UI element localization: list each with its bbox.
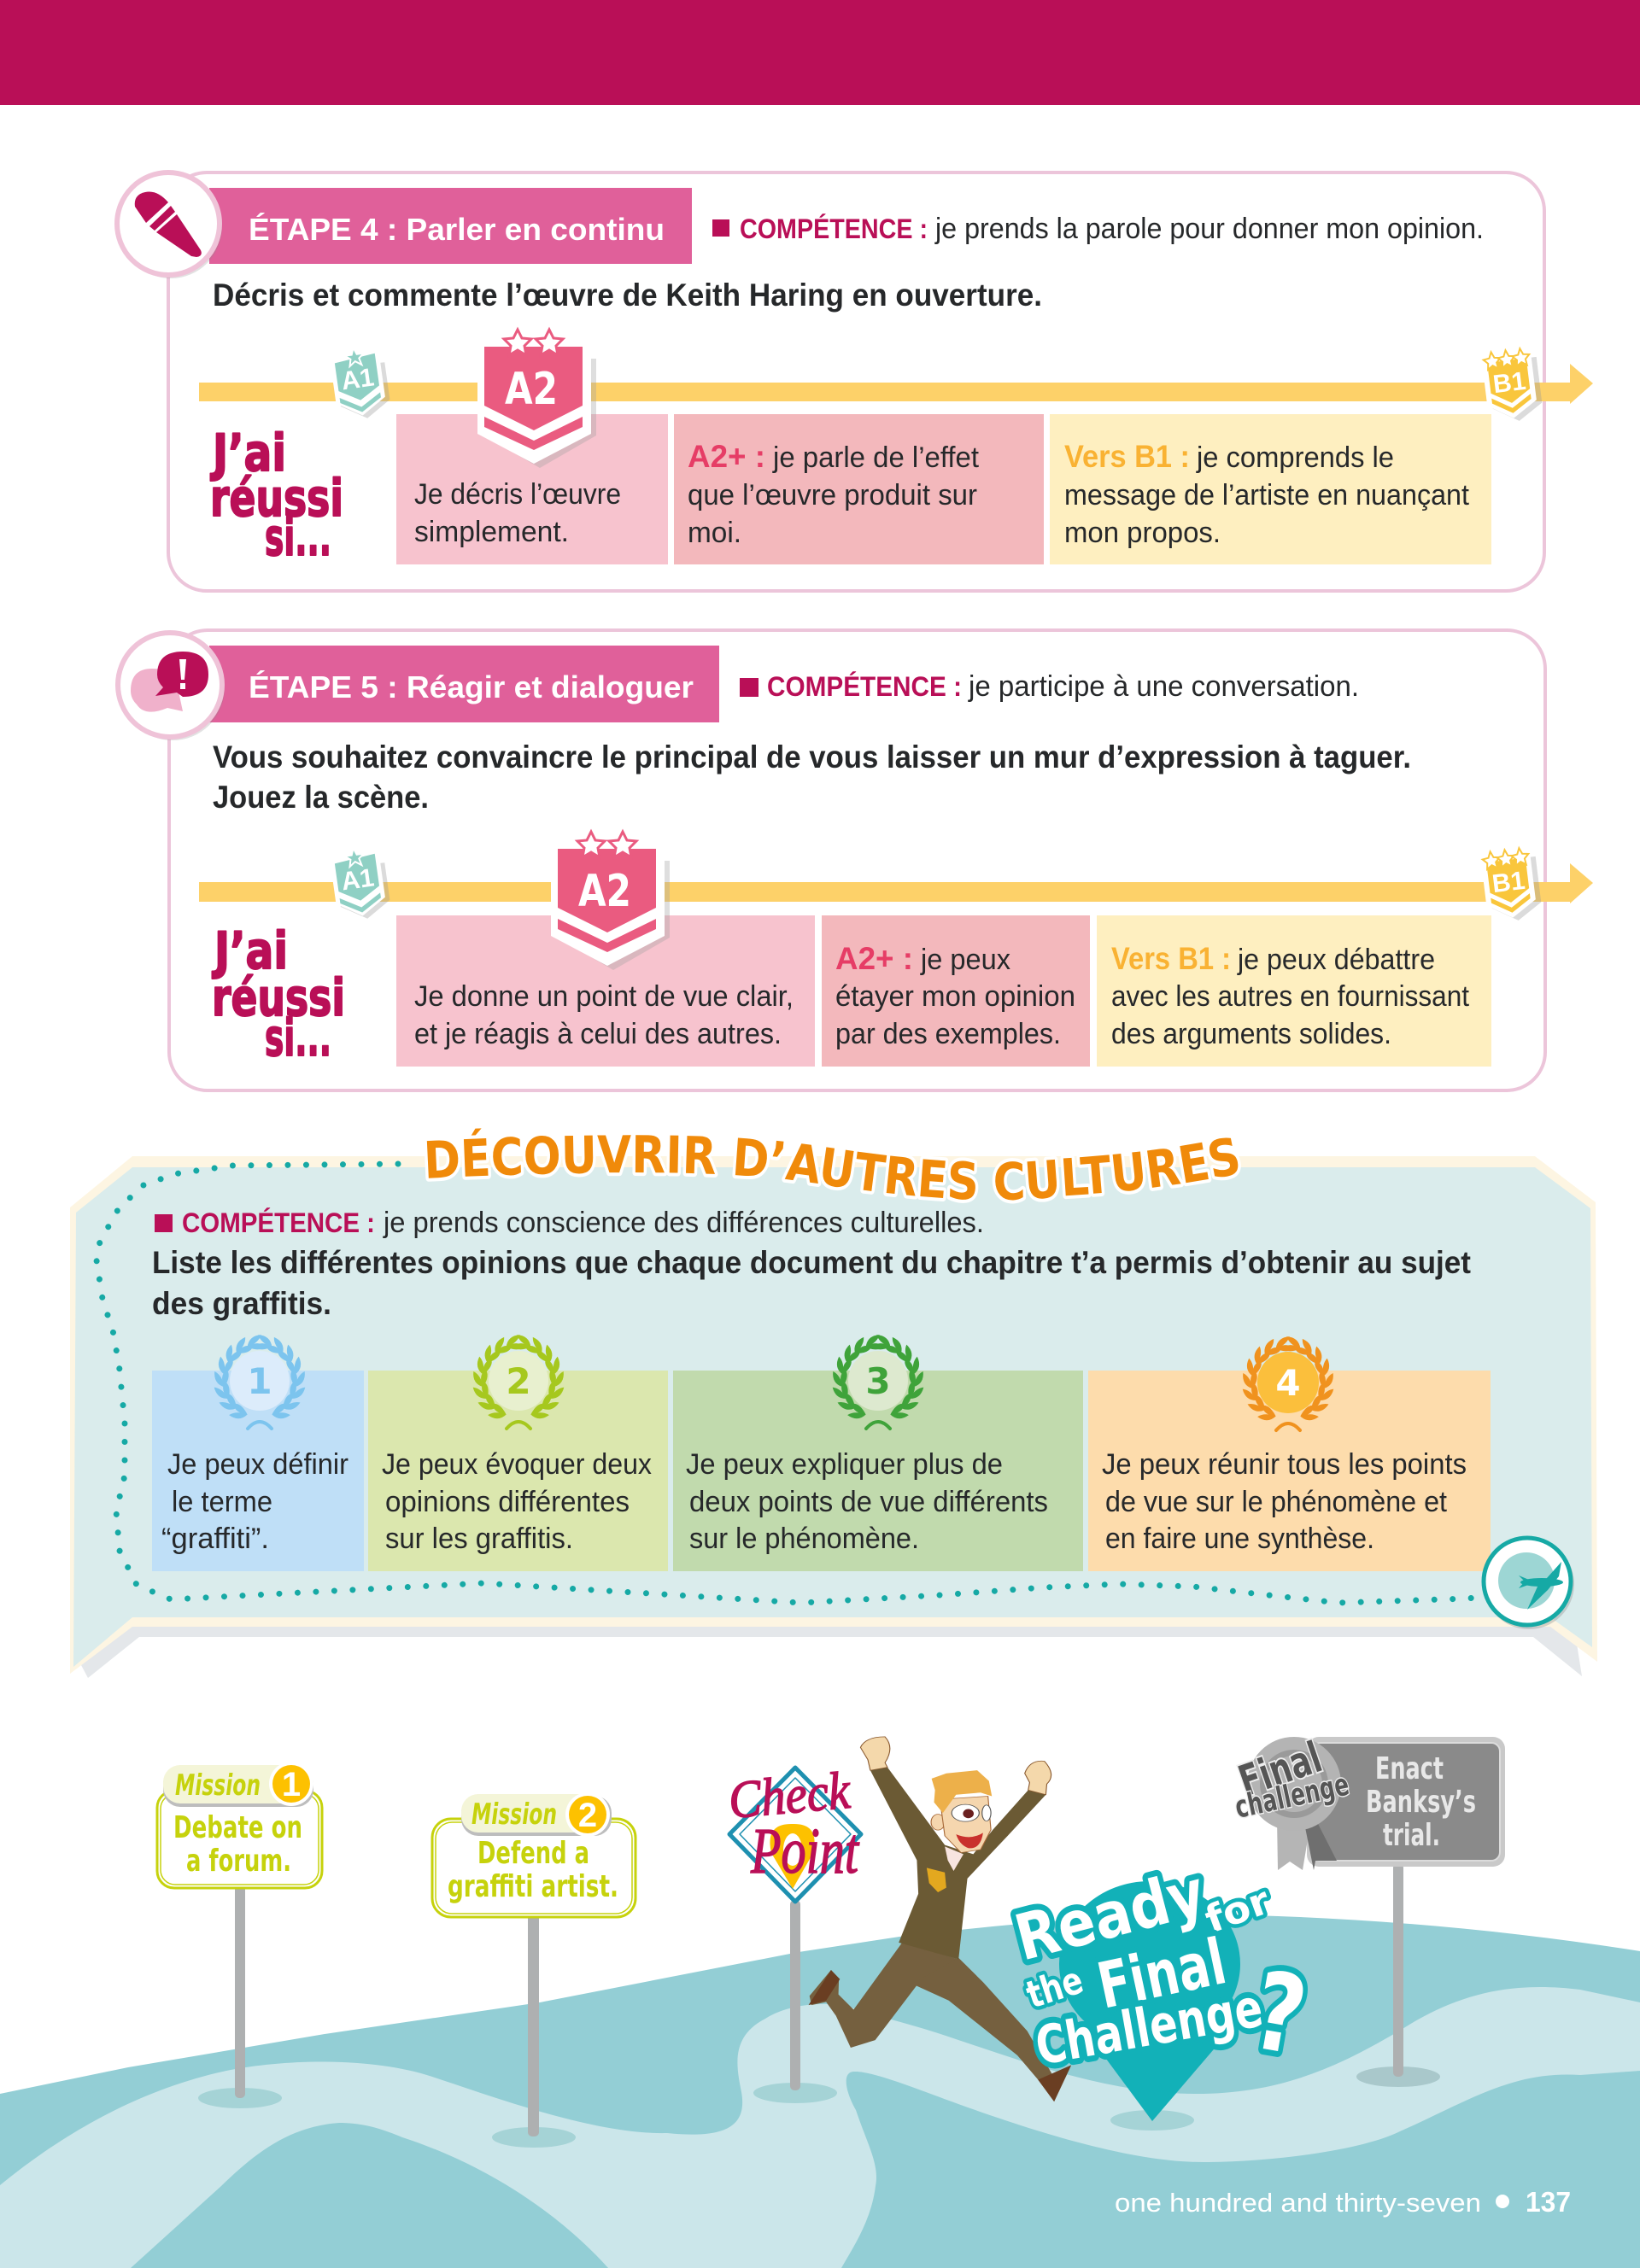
heading banner: étape 4: ÉTAPE 4 : Parler en continu: [249, 212, 665, 247]
badge B1: B1: [1491, 367, 1527, 399]
near leg: [912, 1958, 1052, 2081]
result box: A2+: que l’œuvre produit sur: [688, 479, 977, 511]
result box: A2: [396, 414, 668, 564]
j'ai réussi si: J’ai: [210, 424, 286, 483]
level arrow: [199, 863, 1593, 903]
result box: A2: Je donne un point de vue clair,: [414, 980, 794, 1013]
character: jumping boy: [809, 1737, 1071, 2101]
j'ai réussi si: J’ai: [212, 921, 288, 981]
icon: microphone: [117, 172, 222, 278]
result box: A2+: je peux: [920, 944, 1010, 976]
sign: final challenge: Enact: [1375, 1751, 1444, 1786]
pin: ready for the final challenge: ?: [1245, 1948, 1315, 2080]
section title: DÉCOUVRIR D’AUTRES CULTURES: [425, 1128, 1241, 1204]
badge A2: [477, 330, 596, 468]
laurel 3: 3: [865, 1360, 891, 1402]
laurel 4: [1242, 1336, 1334, 1430]
sign: mission 1: 1: [282, 1766, 301, 1803]
level arrow: [199, 364, 1593, 404]
pin: ready for the final challenge: Challenge: [1031, 1976, 1268, 2078]
sign: mission 1: a forum.: [186, 1844, 291, 1879]
sign: final challenge: Final: [1233, 1733, 1328, 1806]
badge A1: A1: [339, 363, 376, 395]
pin: ready for the final challenge: Final: [1092, 1925, 1232, 2024]
page number: one hundred and thirty-seven: [1115, 2188, 1481, 2218]
result box: A2+: par des exemples.: [835, 1018, 1061, 1050]
badge A2: A2: [505, 364, 558, 415]
card 4: en faire une synthèse.: [1105, 1523, 1374, 1555]
result box: vers B1: [1050, 414, 1491, 564]
laurel 2: [472, 1334, 565, 1429]
result box: A2: Je décris l’œuvre: [414, 478, 621, 511]
panel: étape 4: [117, 172, 1593, 591]
shield crest: [927, 1868, 946, 1892]
sign: mission 1: [157, 1762, 322, 2108]
competence line: je prends conscience des différences culturelles.: [383, 1207, 984, 1239]
laurel 4: 4: [1275, 1362, 1301, 1404]
icon: speech bubbles: [118, 633, 225, 740]
result box: A2+: A2+ :: [835, 941, 913, 976]
badge B1: [1480, 846, 1543, 924]
badge A2: A2: [578, 866, 631, 917]
dotted route: [97, 1164, 1491, 1603]
card 1: le terme: [172, 1486, 272, 1518]
j'ai réussi si: si...: [265, 508, 331, 568]
sign: final challenge: Banksy’s: [1366, 1785, 1476, 1820]
sign: final challenge: trial.: [1383, 1818, 1440, 1853]
top banner: [0, 0, 1640, 105]
pin: ready for the final challenge: Ready: [1008, 1856, 1212, 1975]
result box: A2+: [822, 915, 1090, 1067]
instruction: des graffitis.: [152, 1286, 331, 1321]
card 4: [1088, 1371, 1491, 1571]
heading banner: étape 5: [209, 646, 719, 722]
competence line: COMPÉTENCE :: [740, 213, 928, 244]
card 3: sur le phénomène.: [689, 1523, 919, 1555]
result box: vers B1: avec les autres en fournissant: [1111, 980, 1470, 1013]
instruction: [152, 1245, 1471, 1321]
panel: découvrir d'autres cultures: [70, 1128, 1597, 1678]
result box: vers B1: message de l’artiste en nuançant: [1064, 479, 1470, 511]
j'ai réussi si: si...: [265, 1008, 331, 1068]
result box: vers B1: [1097, 915, 1491, 1067]
laurel 3: [832, 1334, 924, 1429]
sign: check point: [726, 1762, 861, 2103]
card 3: [673, 1371, 1083, 1571]
result box: A2+: étayer mon opinion: [835, 980, 1075, 1013]
instruction: [213, 739, 1411, 815]
heading banner: étape 4: [209, 188, 692, 264]
competence line: COMPÉTENCE :: [767, 671, 962, 702]
result box: A2+: je parle de l’effet: [772, 441, 980, 474]
card 2: [368, 1371, 668, 1571]
j'ai réussi si: réussi: [212, 968, 345, 1028]
left eye: [952, 1804, 979, 1821]
laurel 1: [214, 1334, 306, 1429]
sign: mission 1: Mission: [175, 1768, 261, 1803]
card 1: “graffiti”.: [161, 1523, 269, 1555]
instruction: Vous souhaitez convaincre le principal de vous laisser un mur d’expression à taguer.: [213, 739, 1411, 775]
landscape hills: [0, 1914, 1640, 2268]
j'ai réussi si: réussi: [210, 469, 343, 529]
result box: vers B1: mon propos.: [1064, 517, 1221, 549]
sign: mission 2: [432, 1792, 636, 2148]
torso and arms: [870, 1768, 1046, 1960]
far leg: [810, 1943, 958, 2048]
result box: A2: [396, 915, 815, 1067]
icon: plane: [1484, 1538, 1574, 1629]
competence line: [740, 670, 1359, 703]
right eye: [982, 1805, 991, 1821]
badge A2: [551, 832, 670, 970]
heading banner: étape 5: ÉTAPE 5 : Réagir et dialoguer: [249, 669, 694, 704]
shoes: [809, 1970, 1071, 2101]
pin: ready for the final challenge: [1008, 1856, 1315, 2131]
card 3: deux points de vue différents: [689, 1486, 1048, 1518]
competence line: COMPÉTENCE :: [182, 1207, 375, 1238]
pin: ready for the final challenge: for: [1199, 1879, 1275, 1942]
sign: check point: Check: [726, 1762, 853, 1830]
sign: final challenge: [1232, 1733, 1505, 2087]
page number: 137: [1526, 2186, 1571, 2218]
instruction: Jouez la scène.: [213, 780, 429, 815]
laurel 2: 2: [506, 1360, 531, 1402]
result box: vers B1: Vers B1 :: [1111, 941, 1231, 976]
result box: A2+: [674, 414, 1044, 564]
hair: [932, 1770, 992, 1813]
j'ai réussi si: [212, 921, 345, 1068]
laurel 1: 1: [247, 1360, 272, 1402]
shirt collar: [945, 1846, 964, 1871]
sign: mission 2: Mission: [472, 1797, 557, 1832]
panel frame: [169, 630, 1545, 1090]
sign: mission 2: graffiti artist.: [448, 1869, 618, 1904]
card 4: Je peux réunir tous les points: [1102, 1448, 1467, 1481]
instruction: Décris et commente l’œuvre de Keith Haring en ouverture.: [213, 278, 1042, 313]
badge B1: B1: [1491, 867, 1526, 898]
result box: A2: simplement.: [414, 516, 569, 548]
panel frame: [168, 172, 1544, 591]
card 4: de vue sur le phénomène et: [1105, 1486, 1448, 1518]
sign: mission 2: Defend a: [477, 1836, 589, 1871]
instruction: Liste les différentes opinions que chaque document du chapitre t’a permis d’obtenir au sujet: [152, 1245, 1471, 1280]
panel: étape 5: [118, 630, 1593, 1090]
badge A1: [329, 845, 392, 922]
card 3: Je peux expliquer plus de: [686, 1448, 1003, 1481]
badge A1: [329, 344, 392, 422]
badge B1: [1481, 347, 1543, 424]
result box: vers B1: des arguments solides.: [1111, 1018, 1391, 1050]
mouth: [956, 1833, 983, 1848]
competence line: [712, 213, 1484, 245]
result box: vers B1: je comprends le: [1196, 441, 1394, 474]
card 1: Je peux définir: [167, 1448, 348, 1481]
card 2: Je peux évoquer deux: [382, 1448, 652, 1481]
sign: final challenge: challenge: [1232, 1768, 1352, 1826]
result box: vers B1: Vers B1 :: [1064, 439, 1190, 474]
pupil: [963, 1809, 974, 1818]
j'ai réussi si: [210, 424, 343, 568]
result box: vers B1: je peux débattre: [1237, 944, 1435, 976]
fists: [860, 1737, 1051, 1795]
panel background: [70, 1156, 1597, 1678]
sign: mission 1: Debate on: [173, 1810, 302, 1845]
competence line: je prends la parole pour donner mon opinion.: [934, 213, 1484, 245]
head: [940, 1797, 991, 1853]
card 1: [152, 1371, 364, 1571]
pin: ready for the final challenge: the: [1022, 1959, 1088, 2017]
competence line: je participe à une conversation.: [968, 670, 1359, 703]
card 2: sur les graffitis.: [385, 1523, 573, 1555]
result box: A2+: moi.: [688, 517, 741, 549]
result box: A2: et je réagis à celui des autres.: [414, 1018, 782, 1050]
sign: mission 2: 2: [578, 1797, 597, 1834]
sign: check point: Point: [750, 1815, 859, 1887]
ear: [931, 1815, 945, 1830]
result box: A2+: A2+ :: [688, 439, 765, 474]
card 2: opinions différentes: [385, 1486, 630, 1518]
badge A1: A1: [339, 863, 376, 896]
